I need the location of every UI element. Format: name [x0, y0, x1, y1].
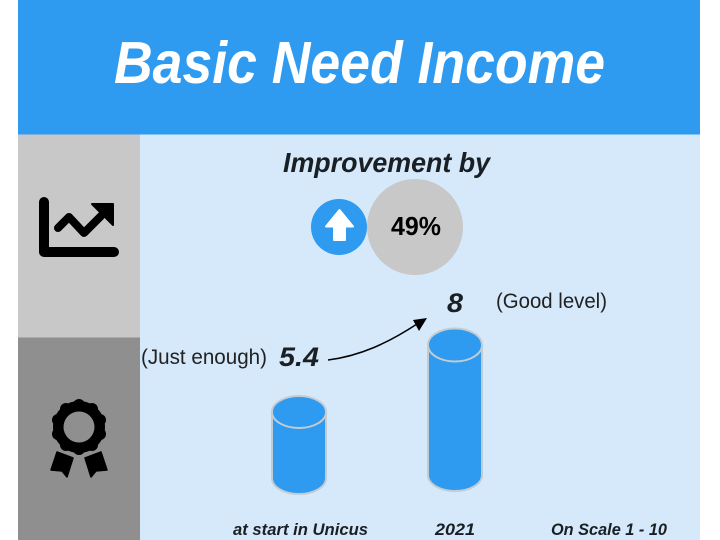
bar: start cylinder [272, 396, 326, 494]
callout: 49 percent [367, 179, 463, 275]
panel: chart icon sidebar [18, 134, 140, 338]
icon: rising line chart [44, 202, 114, 252]
bar: 2021 cylinder [428, 328, 482, 491]
panel: content background [140, 134, 700, 540]
label: good level: (Good level) [496, 290, 607, 313]
callout: 49 percent: 49% [391, 211, 441, 241]
axis label: scale note: On Scale 1 - 10 [551, 520, 668, 539]
title: Basic Need Income [114, 30, 605, 96]
title banner [18, 0, 700, 134]
icon: award rosette [51, 399, 107, 477]
axis label: at start in Unicus: at start in Unicus [233, 520, 368, 539]
heading: improvement: Improvement by [283, 147, 492, 178]
icon: up arrow badge [311, 199, 367, 255]
arrow: growth from 5.4 to 8 [328, 318, 427, 360]
axis label: 2021: 2021 [434, 520, 475, 539]
value: 5.4: 5.4 [279, 342, 319, 372]
panel: award icon sidebar [18, 338, 140, 540]
value: 8: 8 [447, 288, 463, 318]
label: just enough: (Just enough) [141, 346, 267, 369]
